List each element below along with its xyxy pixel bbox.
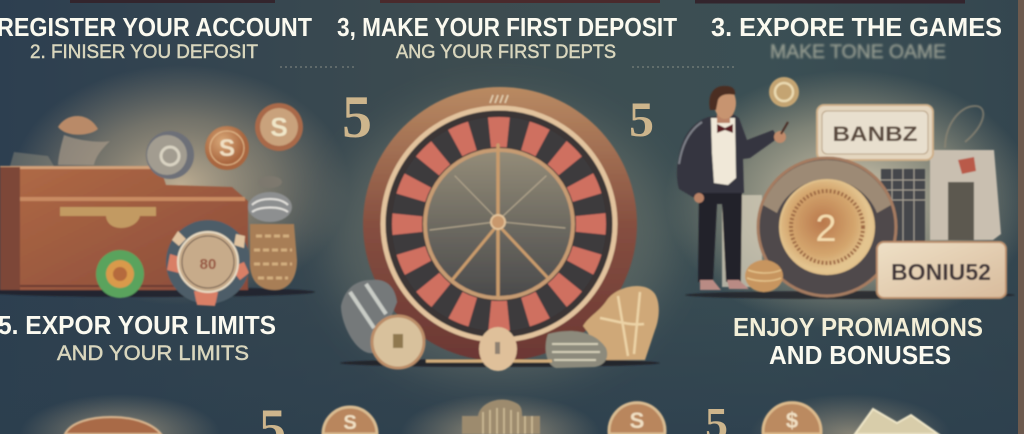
icon: coin left	[323, 407, 377, 434]
icon: wallet	[0, 166, 248, 290]
jacket	[677, 114, 778, 199]
badge: bonus label	[877, 242, 1006, 298]
heading: enjoy promotions and bonuses: ENJOY PROMAMONS	[733, 312, 983, 342]
panel: bottom row icons	[65, 400, 938, 434]
stack of notes	[546, 331, 607, 368]
icon: dollar coin: $	[786, 408, 798, 433]
stack: grey chips left	[341, 280, 397, 353]
lock ornament	[426, 327, 552, 371]
badge: bamboo label	[817, 105, 933, 160]
hand	[774, 131, 786, 143]
numeral 5 left of wheel: 5	[342, 84, 372, 150]
icon: large coin with 2	[758, 158, 896, 296]
hair	[709, 86, 735, 110]
icon: coin right	[609, 403, 665, 434]
badge: bamboo label: BANBZ	[832, 123, 918, 146]
floor shadow	[685, 291, 1015, 299]
icon: bank building	[462, 400, 540, 434]
gold pile right	[583, 286, 659, 360]
icon: banknotes	[855, 409, 938, 434]
icon: copper coin	[205, 126, 249, 170]
heading: explore the games: MAKE TONE OAME	[770, 42, 946, 63]
bow tie	[717, 124, 733, 133]
icon: gold bag	[250, 224, 297, 290]
shoes	[700, 280, 749, 290]
icon: coin left: S	[343, 412, 357, 434]
outer rim	[363, 87, 637, 361]
numeral 5 right of wheel: 5	[629, 91, 654, 147]
floor shadow	[340, 359, 660, 367]
legs	[698, 190, 742, 282]
heading: make your first deposit: 3, MAKE YOUR FIRST DEPOSIT	[337, 12, 677, 42]
icon: grey coin	[146, 131, 194, 179]
shirt	[711, 118, 736, 185]
heading: explore the games: 3. EXPORE THE GAMES	[711, 12, 1002, 42]
coin bottom left	[372, 316, 424, 368]
icon: silver coin stack	[248, 176, 292, 222]
centre disc	[425, 150, 573, 298]
icon: large coin with 2: 2	[815, 208, 837, 250]
cream backdrop behind host	[722, 195, 762, 287]
icon: dollar coin	[763, 403, 821, 434]
heading: register your account: REGISTER YOUR ACCOUNT	[0, 12, 312, 42]
heading: enjoy promotions and bonuses	[733, 312, 983, 370]
pocket ring	[398, 123, 600, 325]
panel: wallet and chips	[0, 103, 315, 306]
panel: host, bonus badges and coin	[677, 77, 1015, 299]
heading: register your account	[0, 12, 312, 63]
icon: copper coin: S	[219, 135, 235, 162]
figure: host in tuxedo	[677, 86, 788, 290]
heading: explore your limits: AND YOUR LIMITS	[57, 342, 249, 365]
icon: clothing bag	[930, 150, 1001, 240]
heading: make your first deposit: ANG YOUR FIRST DEPTS	[396, 42, 616, 63]
rim marks	[490, 95, 508, 103]
badge: bonus label: BONIU52	[891, 259, 991, 285]
chart: roulette wheel	[340, 87, 660, 371]
heading: explore your limits: 5. EXPOR YOUR LIMITS	[0, 310, 276, 340]
heading: explore your limits	[0, 310, 276, 365]
icon: shell ornament	[10, 116, 110, 166]
icon: small gold coin	[769, 77, 799, 107]
icon: coin pile	[745, 260, 783, 292]
bag outline	[945, 106, 983, 148]
icon: light copper coin: S	[270, 112, 288, 142]
icon: large poker chip	[166, 220, 250, 306]
heading: explore the games	[711, 12, 1002, 63]
inner rim	[383, 108, 615, 340]
icon: grid basket	[881, 169, 925, 241]
icon: green chip	[96, 250, 144, 298]
left hand	[694, 193, 704, 203]
icon: partial wheel	[65, 417, 161, 434]
heading: enjoy promotions and bonuses: AND BONUSES	[769, 340, 951, 370]
heading: register your account: 2. FINISER YOU DEFOSIT	[30, 42, 258, 63]
heading: make your first deposit	[337, 12, 677, 63]
hub	[491, 215, 505, 229]
neck and head	[717, 110, 730, 123]
spokes	[430, 145, 565, 296]
icon: coin right: S	[630, 408, 644, 433]
floor shadow	[0, 287, 315, 297]
icon: large poker chip: 80	[200, 256, 216, 273]
icon: light copper coin	[255, 103, 303, 151]
